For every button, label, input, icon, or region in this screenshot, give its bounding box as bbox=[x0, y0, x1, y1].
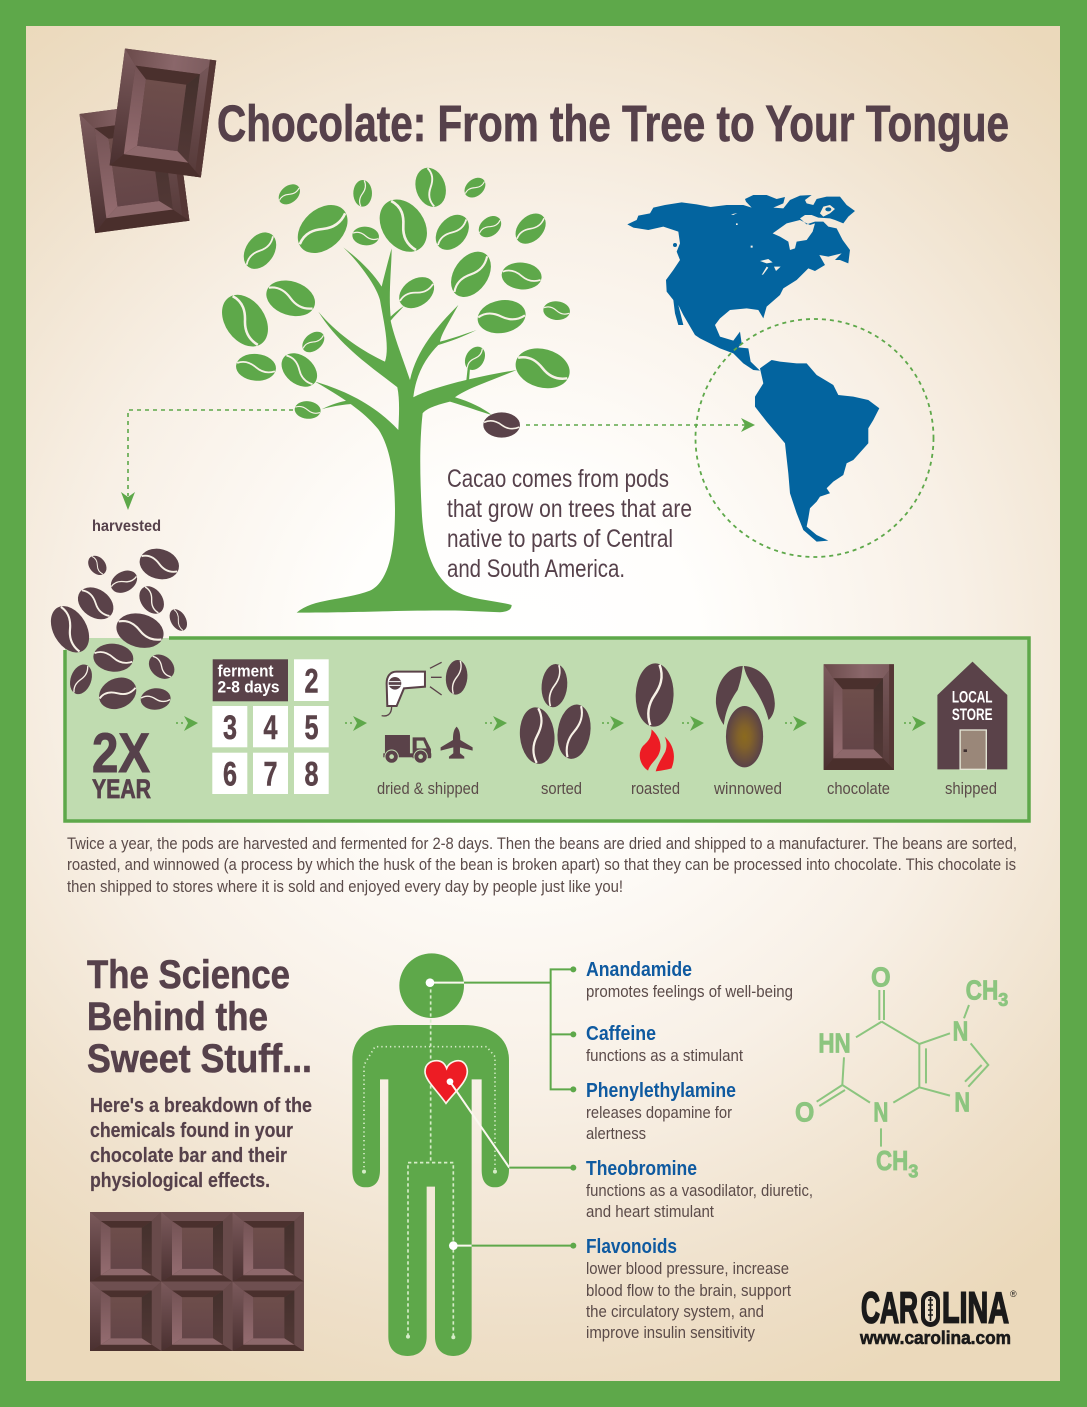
text block: cacao origin: Cacao comes from pods bbox=[447, 465, 669, 493]
item: Flavonoids: lower blood pressure, increase bbox=[586, 1260, 789, 1278]
list: chemicals and effects bbox=[586, 959, 813, 1342]
logo: Carolina: LINA bbox=[942, 1284, 1009, 1332]
diagram: theobromine molecule bbox=[795, 962, 1008, 1181]
arrow: step 2 bbox=[345, 716, 367, 731]
diagram: theobromine molecule: CH bbox=[876, 1145, 908, 1176]
calendar: ferment 2-8 days bbox=[212, 659, 329, 794]
illustration: cacao tree with bean leaves bbox=[213, 164, 574, 613]
step labels: shipped bbox=[945, 779, 997, 798]
text block: process description bbox=[67, 835, 1017, 896]
step labels: chocolate bbox=[827, 779, 890, 798]
item: Flavonoids bbox=[586, 1236, 791, 1342]
calendar: ferment 2-8 days: 6 bbox=[223, 756, 237, 794]
step labels: dried & shipped bbox=[377, 779, 479, 798]
calendar: ferment 2-8 days: 3 bbox=[223, 709, 237, 747]
text block: cacao origin: and South America. bbox=[447, 555, 625, 583]
item: Flavonoids: blood flow to the brain, support bbox=[586, 1282, 791, 1300]
item: Caffeine bbox=[586, 1023, 743, 1065]
item: Caffeine: Caffeine bbox=[586, 1023, 656, 1045]
label: 2X year bbox=[92, 721, 151, 804]
item: Flavonoids: improve insulin sensitivity bbox=[586, 1324, 756, 1342]
item: Caffeine: functions as a stimulant bbox=[586, 1047, 743, 1065]
item: Flavonoids: the circulatory system, and bbox=[586, 1303, 764, 1321]
diagram: theobromine molecule: CH bbox=[966, 974, 998, 1005]
item: Phenylethylamine bbox=[586, 1080, 736, 1143]
text block: breakdown intro: physiological effects. bbox=[90, 1169, 270, 1192]
diagram: theobromine molecule: HN bbox=[818, 1027, 851, 1058]
text block: breakdown intro bbox=[90, 1094, 312, 1192]
icon: local store bbox=[937, 662, 1007, 769]
calendar: ferment 2-8 days: 2-8 days bbox=[218, 678, 280, 697]
arrow: step 3 bbox=[485, 716, 507, 731]
icon: local store: LOCAL bbox=[952, 687, 993, 707]
label: 2X year: YEAR bbox=[92, 774, 151, 804]
diagram: theobromine molecule: N bbox=[953, 1016, 968, 1047]
diagram: theobromine molecule: O bbox=[871, 962, 891, 993]
text block: breakdown intro: chemicals found in your bbox=[90, 1119, 293, 1142]
text block: process description: then shipped to stores where it is sold and enjoyed every day by people just like you! bbox=[67, 878, 623, 896]
item: Anandamide bbox=[586, 959, 793, 1001]
item: Phenylethylamine: Phenylethylamine bbox=[586, 1080, 736, 1102]
map: North and South America bbox=[627, 195, 879, 542]
icon: local store: STORE bbox=[952, 704, 992, 724]
text block: cacao origin: that grow on trees that are bbox=[447, 495, 692, 523]
item: Anandamide: Anandamide bbox=[586, 959, 692, 981]
logo: Carolina: ® bbox=[1010, 1289, 1017, 1299]
item: Theobromine: and heart stimulant bbox=[586, 1203, 714, 1221]
diagram: theobromine molecule: 3 bbox=[998, 989, 1008, 1010]
arrow: step 6 bbox=[785, 716, 807, 731]
calendar: ferment 2-8 days: 5 bbox=[304, 709, 318, 747]
arrow: step 4 bbox=[602, 716, 624, 731]
heading: the science: The Science bbox=[87, 953, 290, 997]
heading: the science: Behind the bbox=[87, 995, 268, 1039]
text block: cacao origin bbox=[447, 465, 692, 583]
item: Theobromine: functions as a vasodilator, diuretic, bbox=[586, 1182, 813, 1200]
icon: brown cacao pod bbox=[483, 412, 520, 438]
item: Anandamide: promotes feelings of well-being bbox=[586, 983, 793, 1001]
heading: the science: Sweet Stuff... bbox=[87, 1037, 312, 1081]
item: Phenylethylamine: alertness bbox=[586, 1125, 646, 1143]
item: Theobromine: Theobromine bbox=[586, 1158, 697, 1180]
diagram: theobromine molecule: N bbox=[873, 1097, 888, 1128]
arrow: step 5 bbox=[682, 716, 704, 731]
step labels bbox=[377, 779, 997, 798]
arrow: step 1 bbox=[176, 716, 198, 731]
logo: Carolina: O bbox=[921, 1284, 939, 1332]
step labels: roasted bbox=[631, 779, 680, 798]
icon: chocolate bar bbox=[824, 664, 894, 770]
North America bbox=[627, 195, 855, 371]
item: Phenylethylamine: releases dopamine for bbox=[586, 1104, 732, 1122]
logo: Carolina bbox=[859, 1284, 1017, 1348]
calendar: ferment 2-8 days: 4 bbox=[264, 709, 278, 747]
icon: heart bbox=[425, 1061, 467, 1103]
label: harvested: harvested bbox=[92, 518, 161, 535]
text block: breakdown intro: Here's a breakdown of the bbox=[90, 1094, 312, 1117]
step labels: winnowed bbox=[713, 779, 782, 798]
arrow: tree to harvested bbox=[121, 410, 293, 510]
diagram: theobromine molecule: O bbox=[795, 1097, 814, 1128]
calendar: ferment 2-8 days: 8 bbox=[304, 756, 318, 794]
illustration: human body with chemical pathways bbox=[352, 953, 576, 1356]
item: Theobromine bbox=[586, 1158, 813, 1221]
arrow: pod to map bbox=[526, 418, 755, 432]
step labels: sorted bbox=[541, 779, 582, 798]
icon: two tilted chocolate bars bbox=[80, 48, 216, 233]
icon: roasted bean over flame bbox=[635, 663, 675, 771]
icon: sorted beans bbox=[517, 663, 594, 765]
text block: cacao origin: native to parts of Central bbox=[447, 525, 673, 553]
icon: winnowed bean with husk bbox=[716, 666, 775, 767]
logo: Carolina: www.carolina.com bbox=[859, 1328, 1011, 1348]
calendar: ferment 2-8 days: ferment bbox=[218, 662, 274, 680]
icon: dryer, truck and plane bbox=[382, 659, 473, 763]
arrow: step 7 bbox=[904, 716, 926, 731]
text block: breakdown intro: chocolate bar and their bbox=[90, 1144, 287, 1167]
item: Flavonoids: Flavonoids bbox=[586, 1236, 677, 1258]
heading: the science bbox=[87, 953, 312, 1081]
diagram: theobromine molecule: N bbox=[954, 1087, 970, 1118]
icon: six-piece chocolate bar bbox=[90, 1212, 304, 1351]
panel: process steps bbox=[43, 544, 1029, 821]
label: 2X year: 2X bbox=[92, 721, 150, 784]
icon: harvested beans pile bbox=[43, 544, 191, 715]
dashed circle highlighting the cacao region bbox=[696, 319, 934, 557]
diagram: theobromine molecule: 3 bbox=[908, 1160, 918, 1181]
logo: Carolina: CAR bbox=[861, 1284, 918, 1332]
calendar: ferment 2-8 days: 7 bbox=[264, 756, 278, 794]
South America bbox=[755, 360, 879, 542]
calendar: ferment 2-8 days: 2 bbox=[304, 662, 318, 700]
